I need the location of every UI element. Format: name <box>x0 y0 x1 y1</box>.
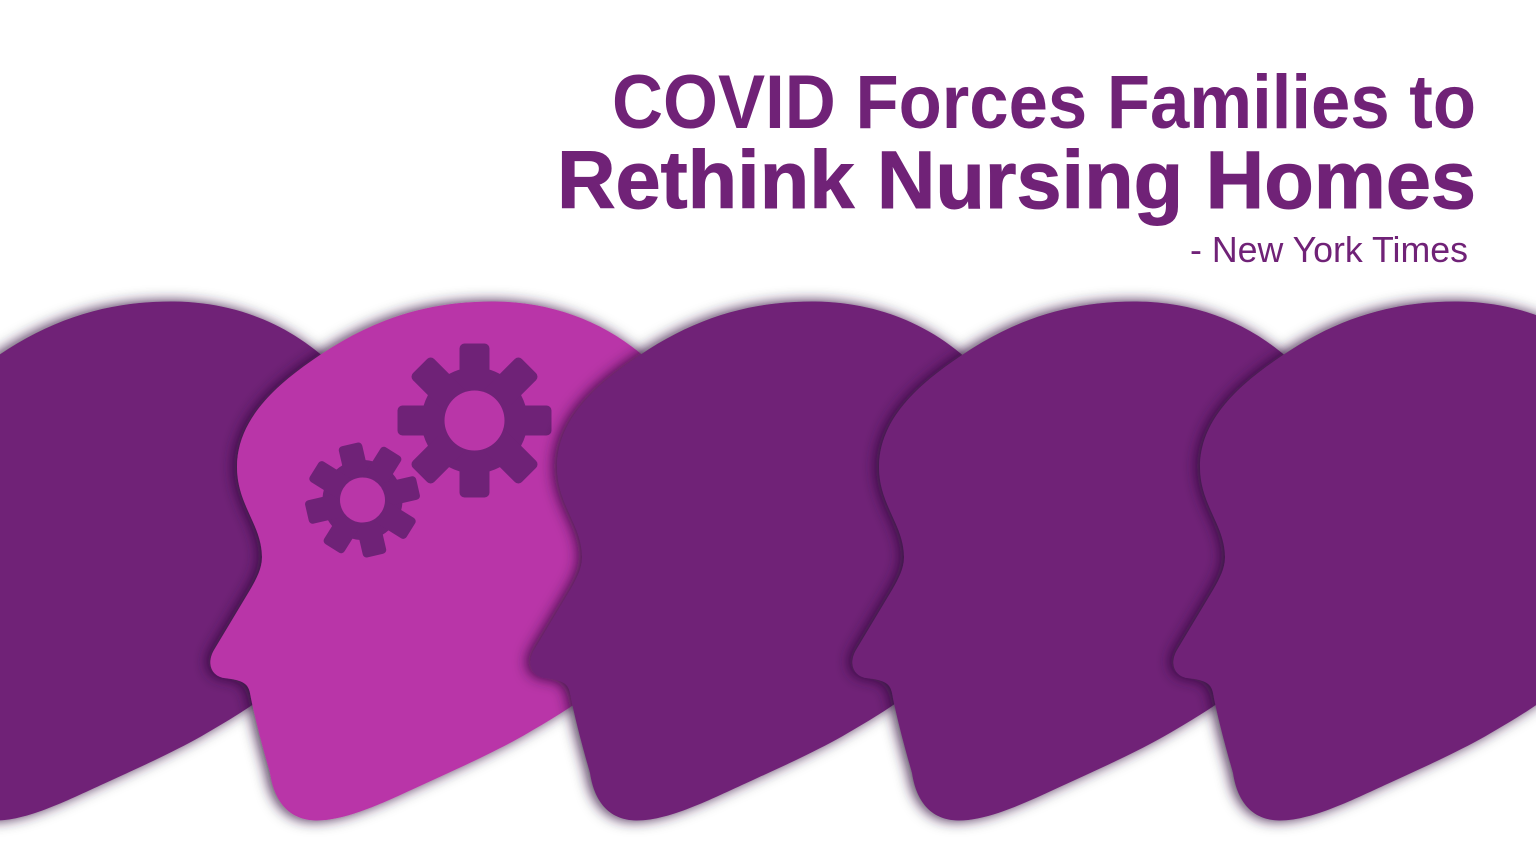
title <box>557 60 1476 226</box>
head 3 <box>530 301 1025 821</box>
title: COVID Forces Families to <box>612 60 1476 145</box>
source attribution: - New York Times <box>1190 229 1468 270</box>
icon: large gear <box>398 344 552 498</box>
head 5 <box>1173 301 1536 821</box>
title: Rethink Nursing Homes <box>557 135 1476 226</box>
icon: small gear <box>294 432 431 568</box>
head 2 with gears <box>210 301 705 821</box>
head 1 <box>0 301 384 821</box>
head 4 <box>852 301 1347 821</box>
